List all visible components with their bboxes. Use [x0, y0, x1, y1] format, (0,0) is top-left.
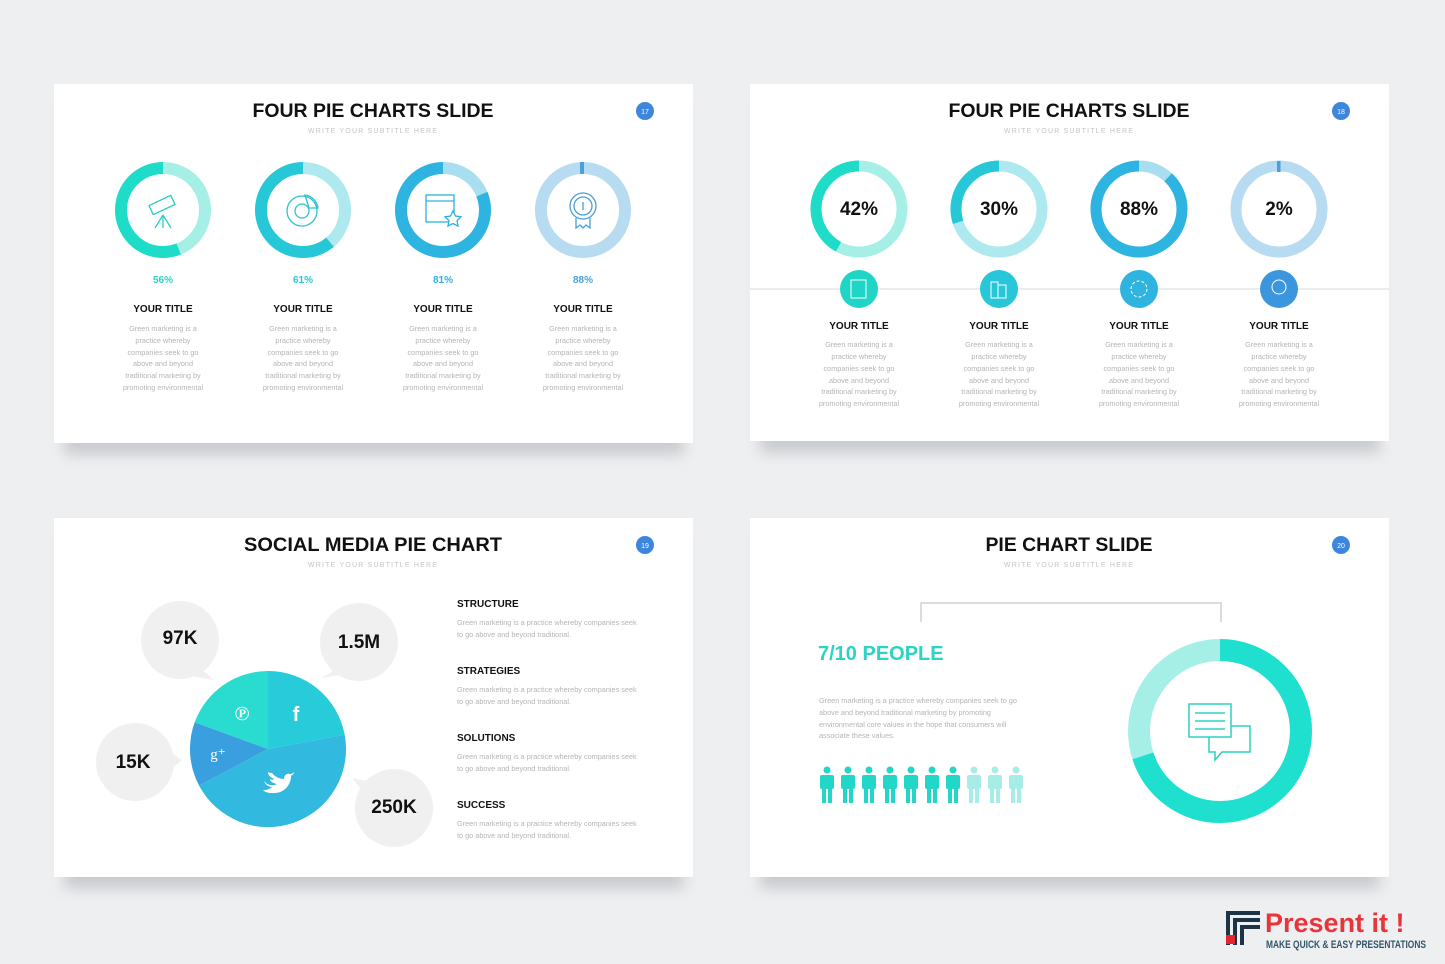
title: SOCIAL MEDIA PIE CHART: [244, 535, 502, 556]
column texts slide 17: traditional marketing by: [545, 371, 621, 380]
heading 7/10 people: 7/10 PEOPLE: [818, 643, 944, 665]
column texts slide 18: YOUR TITLE: [829, 321, 889, 332]
bubble values: 97K: [163, 628, 198, 649]
column texts slide 17: practice whereby: [415, 336, 471, 345]
donut 88%: [1096, 166, 1182, 252]
column texts slide 17: practice whereby: [555, 336, 611, 345]
page badge 20: [1332, 536, 1350, 554]
column texts slide 17: practice whereby: [275, 336, 331, 345]
list text: to go above and beyond traditional.: [457, 764, 571, 773]
column texts slide 18: practice whereby: [1251, 352, 1307, 361]
pie chart: f: [293, 704, 300, 726]
pie chart: ℗: [235, 703, 250, 725]
bubble values: 1.5M: [338, 632, 380, 653]
column texts slide 17: [123, 304, 624, 392]
percentages: 61%: [293, 275, 313, 286]
donut 61%: [261, 168, 345, 252]
donut 30%: [956, 166, 1042, 252]
subtitle: WRITE YOUR SUBTITLE HERE: [1004, 128, 1134, 135]
page badge 18: [1332, 102, 1350, 120]
list text: Green marketing is a practice whereby companies seek: [457, 618, 637, 627]
donut 42%: [816, 166, 902, 252]
column texts slide 18: traditional marketing by: [1241, 387, 1317, 396]
list text: Green marketing is a practice whereby companies seek: [457, 819, 637, 828]
column texts slide 18: Green marketing is a: [965, 340, 1034, 349]
panel: slide 17 four pie charts: [54, 84, 693, 455]
column texts slide 18: Green marketing is a: [1105, 340, 1174, 349]
panel: slide 19 social media pie chart: [54, 518, 693, 889]
logo: Present it: [1226, 908, 1426, 951]
column texts slide 18: above and beyond: [969, 376, 1029, 385]
description: associate these values.: [819, 731, 895, 740]
donut 56%: [121, 168, 205, 252]
logo: Present it: Present it !: [1265, 908, 1405, 938]
column texts slide 17: YOUR TITLE: [133, 304, 193, 315]
column texts slide 17: traditional marketing by: [405, 371, 481, 380]
list text: to go above and beyond traditional.: [457, 630, 571, 639]
column texts slide 17: above and beyond: [413, 359, 473, 368]
subtitle: WRITE YOUR SUBTITLE HERE: [308, 562, 438, 569]
column texts slide 18: above and beyond: [1109, 376, 1169, 385]
column texts slide 18: YOUR TITLE: [1109, 321, 1169, 332]
column texts slide 18: traditional marketing by: [961, 387, 1037, 396]
bubble values: 15K: [116, 752, 151, 773]
column texts slide 17: Green marketing is a: [129, 324, 198, 333]
list text: to go above and beyond traditional.: [457, 697, 571, 706]
page badge 19: 19: [641, 543, 649, 550]
column texts slide 18: promoting environmental: [819, 399, 900, 408]
column texts slide 18: companies seek to go: [1244, 364, 1314, 373]
description: environmental core values in the hope that consumers will: [819, 720, 1007, 729]
page badge 17: 17: [641, 109, 649, 116]
column texts slide 18: YOUR TITLE: [969, 321, 1029, 332]
column texts slide 17: YOUR TITLE: [273, 304, 333, 315]
column texts slide 18: practice whereby: [971, 352, 1027, 361]
column texts slide 17: Green marketing is a: [549, 324, 618, 333]
column texts slide 18: [819, 321, 1320, 408]
bubble values: [116, 628, 417, 818]
percentages: 56%: [153, 275, 173, 286]
donut 88%: [541, 162, 625, 252]
column texts slide 17: companies seek to go: [128, 348, 198, 357]
description: above and beyond traditional marketing by promoting: [819, 708, 991, 717]
column texts slide 18: companies seek to go: [964, 364, 1034, 373]
column texts slide 17: Green marketing is a: [269, 324, 338, 333]
column texts slide 17: promoting environmental: [263, 383, 344, 392]
page badge 18: 18: [1337, 109, 1345, 116]
column texts slide 17: traditional marketing by: [125, 371, 201, 380]
column texts slide 18: promoting environmental: [1239, 399, 1320, 408]
column texts slide 17: promoting environmental: [543, 383, 624, 392]
title: PIE CHART SLIDE: [986, 535, 1152, 556]
list text: STRATEGIES: [457, 666, 520, 677]
column texts slide 17: above and beyond: [133, 359, 193, 368]
donut 70%: [1139, 650, 1301, 812]
percentages: 88%: [573, 275, 593, 286]
people icons: [820, 766, 1023, 803]
list text: SOLUTIONS: [457, 733, 516, 744]
column texts slide 17: Green marketing is a: [409, 324, 478, 333]
panel: slide 18 four pie charts with percentages: [750, 84, 1389, 453]
panel: slide 20 pie chart slide: [750, 518, 1389, 889]
donut 42%: 42%: [840, 199, 878, 220]
column texts slide 17: above and beyond: [553, 359, 613, 368]
column texts slide 18: above and beyond: [829, 376, 889, 385]
page badge 19: [636, 536, 654, 554]
page badge 20: 20: [1337, 543, 1345, 550]
donut 2%: [1236, 161, 1322, 252]
column texts slide 17: YOUR TITLE: [413, 304, 473, 315]
percentages: 81%: [433, 275, 453, 286]
list text: STRUCTURE: [457, 599, 519, 610]
list text: SUCCESS: [457, 800, 506, 811]
column texts slide 18: traditional marketing by: [1101, 387, 1177, 396]
icon circles: [840, 270, 1298, 308]
column texts slide 18: Green marketing is a: [1245, 340, 1314, 349]
list text: [457, 599, 637, 840]
column texts slide 18: above and beyond: [1249, 376, 1309, 385]
column texts slide 18: traditional marketing by: [821, 387, 897, 396]
donut 88%: 88%: [1120, 199, 1158, 220]
column texts slide 18: promoting environmental: [959, 399, 1040, 408]
bubble values: 250K: [371, 797, 417, 818]
column texts slide 18: practice whereby: [831, 352, 887, 361]
donut 81%: [401, 168, 485, 252]
donut 2%: 2%: [1265, 199, 1293, 220]
column texts slide 17: companies seek to go: [408, 348, 478, 357]
column texts slide 17: traditional marketing by: [265, 371, 341, 380]
percentages: [153, 275, 593, 286]
list text: Green marketing is a practice whereby companies seek: [457, 752, 637, 761]
title: FOUR PIE CHARTS SLIDE: [252, 101, 494, 122]
column texts slide 17: above and beyond: [273, 359, 333, 368]
list text: Green marketing is a practice whereby companies seek: [457, 685, 637, 694]
title: FOUR PIE CHARTS SLIDE: [948, 101, 1190, 122]
column texts slide 18: companies seek to go: [1104, 364, 1174, 373]
column texts slide 18: Green marketing is a: [825, 340, 894, 349]
subtitle: WRITE YOUR SUBTITLE HERE: [1004, 562, 1134, 569]
subtitle: WRITE YOUR SUBTITLE HERE: [308, 128, 438, 135]
column texts slide 17: promoting environmental: [403, 383, 484, 392]
column texts slide 18: companies seek to go: [824, 364, 894, 373]
column texts slide 17: YOUR TITLE: [553, 304, 613, 315]
list text: to go above and beyond traditional.: [457, 831, 571, 840]
donut 30%: 30%: [980, 199, 1018, 220]
column texts slide 17: practice whereby: [135, 336, 191, 345]
column texts slide 17: companies seek to go: [268, 348, 338, 357]
column texts slide 18: promoting environmental: [1099, 399, 1180, 408]
column texts slide 18: YOUR TITLE: [1249, 321, 1309, 332]
column texts slide 18: practice whereby: [1111, 352, 1167, 361]
column texts slide 17: promoting environmental: [123, 383, 204, 392]
pie chart: [190, 671, 346, 827]
bubbles: [96, 601, 433, 847]
column texts slide 17: companies seek to go: [548, 348, 618, 357]
page badge 17: [636, 102, 654, 120]
pie chart: g⁺: [210, 747, 226, 763]
description: Green marketing is a practice whereby companies seek to go: [819, 696, 1017, 705]
icon: twitter bird: [263, 772, 294, 793]
